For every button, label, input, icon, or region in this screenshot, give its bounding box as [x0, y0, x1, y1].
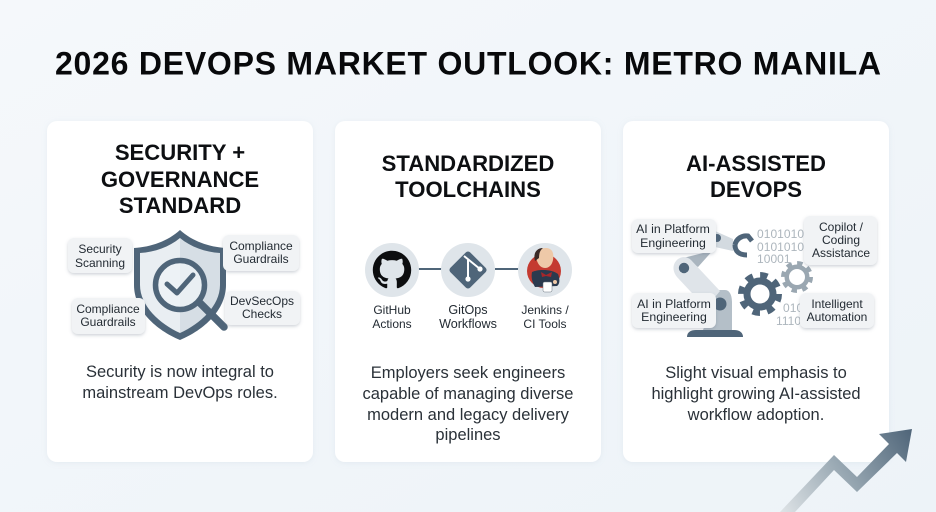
- label: jenkins ci tools: [521, 303, 569, 331]
- label: ai in platform engineering top: [632, 219, 716, 253]
- label: gitops workflows: Workflows: [439, 317, 497, 331]
- label: ai in platform engineering top: Engineering: [640, 236, 706, 250]
- icon: github: [365, 243, 419, 297]
- arrow: upward trend: [780, 429, 912, 512]
- label: jenkins ci tools: Jenkins /: [521, 303, 569, 317]
- heading: DEVOPS: [710, 177, 802, 202]
- icon: git: [441, 243, 495, 297]
- icon: shield with magnifier: [134, 230, 226, 340]
- body text: modern and legacy delivery: [367, 406, 570, 424]
- label: jenkins ci tools: CI Tools: [523, 317, 567, 331]
- binary digits: 1110: [776, 314, 801, 328]
- label: security scanning: Security: [78, 242, 122, 256]
- body text: pipelines: [435, 426, 501, 444]
- body text: Slight visual emphasis to: [665, 364, 847, 382]
- body text: [651, 364, 861, 424]
- panel: security + governance standard: [47, 121, 313, 462]
- label: compliance guardrails top: Guardrails: [233, 252, 289, 266]
- label: compliance guardrails top: Compliance: [229, 239, 293, 253]
- label: compliance guardrails bottom: [72, 298, 145, 334]
- body text: workflow adoption.: [687, 406, 824, 424]
- heading: STANDARD: [119, 193, 241, 218]
- label: intelligent automation: Intelligent: [811, 297, 863, 311]
- label: security scanning: Scanning: [75, 256, 125, 270]
- body text: [363, 364, 573, 444]
- body text: Employers seek engineers: [371, 364, 565, 382]
- label: gitops workflows: [439, 303, 497, 331]
- body text: capable of managing diverse: [363, 385, 573, 403]
- icon: small gear: [783, 263, 811, 291]
- binary digits: 0101010: [757, 240, 804, 254]
- label: ai in platform engineering bottom: Engineering: [641, 310, 707, 324]
- heading: [686, 151, 826, 202]
- binary digits: 10001: [757, 252, 791, 266]
- body text: [82, 363, 278, 402]
- label: github actions: [372, 303, 412, 331]
- binary digits: [757, 227, 804, 328]
- heading: TOOLCHAINS: [395, 177, 541, 202]
- label: security scanning: [68, 238, 132, 273]
- binary digits: 010: [783, 301, 803, 315]
- body text: mainstream DevOps roles.: [82, 384, 278, 402]
- heading: SECURITY +: [115, 140, 245, 165]
- binary digits: 0101010: [757, 227, 804, 241]
- panel: standardized toolchains: [335, 121, 601, 462]
- label: gitops workflows: GitOps: [448, 303, 488, 317]
- label: github actions: Actions: [372, 317, 412, 331]
- card background: [623, 121, 889, 462]
- label: ai in platform engineering top: AI in Platform: [636, 222, 710, 236]
- connector lines: [418, 268, 520, 270]
- icon: jenkins: [518, 243, 572, 297]
- heading: [101, 140, 259, 218]
- label: copilot coding assistance: Copilot /: [819, 220, 864, 234]
- label: compliance guardrails bottom: Compliance: [76, 302, 140, 316]
- label: intelligent automation: Automation: [807, 310, 867, 324]
- label: copilot coding assistance: Assistance: [812, 246, 870, 260]
- card background: [335, 121, 601, 462]
- title: 2026 DEVOPS MARKET OUTLOOK: METRO MANILA: [55, 46, 881, 82]
- label: ai in platform engineering bottom: AI in Platform: [637, 297, 711, 311]
- label: intelligent automation: [800, 293, 874, 328]
- label: ai in platform engineering bottom: [632, 293, 716, 328]
- body text: Security is now integral to: [86, 363, 274, 381]
- body text: highlight growing AI-assisted: [651, 385, 861, 403]
- label: devsecops checks: Checks: [242, 307, 282, 321]
- label: devsecops checks: [225, 291, 300, 325]
- panel: ai-assisted devops: [623, 121, 889, 462]
- icon: robot arm: [673, 231, 752, 337]
- icon: large gear: [741, 275, 779, 313]
- label: copilot coding assistance: Coding: [822, 233, 860, 247]
- label: compliance guardrails bottom: Guardrails: [80, 315, 136, 329]
- label: copilot coding assistance: [804, 216, 877, 265]
- label: github actions: GitHub: [373, 303, 411, 317]
- heading: [382, 151, 554, 202]
- label: devsecops checks: DevSecOps: [230, 294, 294, 308]
- card background: [47, 121, 313, 462]
- heading: STANDARDIZED: [382, 151, 554, 176]
- heading: GOVERNANCE: [101, 167, 259, 192]
- label: compliance guardrails top: [223, 235, 299, 271]
- heading: AI-ASSISTED: [686, 151, 826, 176]
